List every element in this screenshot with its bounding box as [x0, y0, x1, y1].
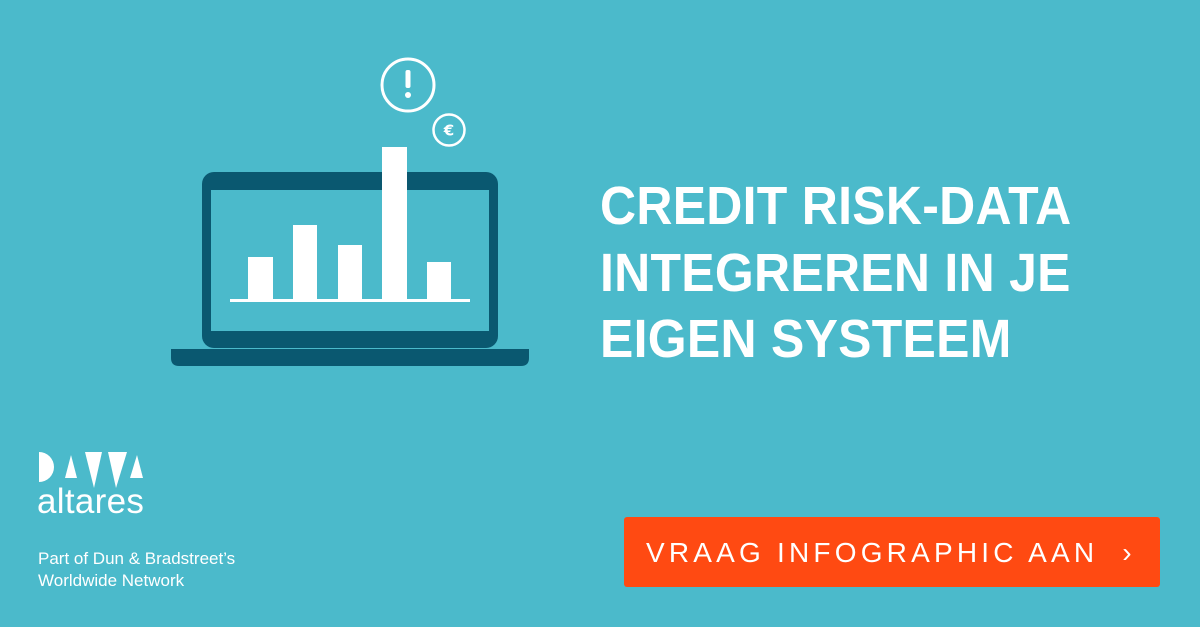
title — [600, 176, 1072, 369]
title: CREDIT RISK-DATA — [600, 176, 1072, 236]
button: call to action: VRAAG INFOGRAPHIC AAN › — [646, 537, 1136, 568]
tagline: Part of Dun & Bradstreet’s — [38, 549, 235, 568]
icon: euro circle — [434, 114, 464, 146]
illustration: laptop with bar chart — [171, 58, 529, 366]
bar chart — [230, 147, 470, 302]
tagline: Worldwide Network — [38, 571, 184, 590]
icon: euro circle: € — [443, 122, 454, 140]
button: call to action — [624, 517, 1160, 587]
laptop base — [171, 349, 529, 366]
title: INTEGREREN IN JE — [600, 243, 1071, 303]
icon: exclamation circle — [382, 59, 434, 111]
title: EIGEN SYSTEEM — [600, 309, 1012, 369]
logo: DATA altares — [37, 452, 144, 521]
logo: DATA altares: altares — [37, 482, 144, 521]
laptop screen frame — [202, 172, 498, 348]
tagline — [38, 549, 235, 590]
